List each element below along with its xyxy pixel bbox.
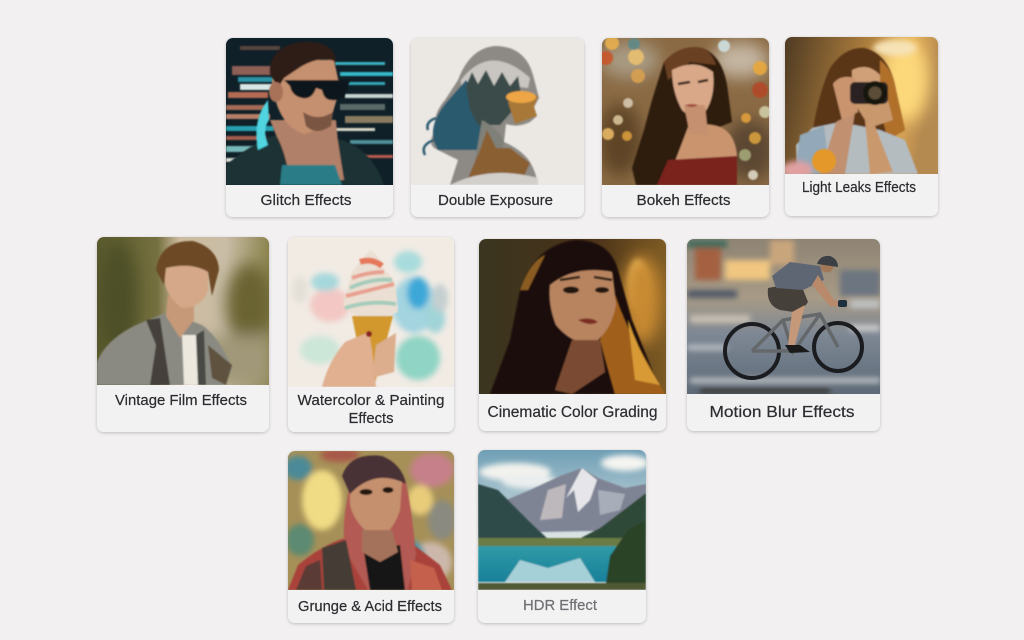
label: Cinematic Color Grading: Cinematic Color Grading — [488, 404, 658, 421]
label: Effects line 2: Effects — [348, 411, 394, 427]
image: light leaks photographer — [781, 37, 938, 179]
card: Light Leaks Effects — [781, 37, 938, 216]
label: Bokeh Effects: Bokeh Effects — [636, 193, 730, 209]
label: Double Exposure: Double Exposure — [438, 193, 553, 209]
label: Light Leaks Effects: Light Leaks Effects — [802, 180, 916, 196]
card: Motion Blur Effects — [687, 239, 880, 431]
image: vintage portrait — [97, 237, 274, 385]
image: HDR mountain lake — [478, 450, 649, 590]
label: Vintage Film Effects: Vintage Film Effects — [115, 393, 247, 409]
label: HDR Effect: HDR Effect — [523, 598, 597, 614]
card: Vintage Film Effects — [97, 237, 274, 432]
card: Grunge & Acid Effects — [284, 448, 456, 623]
card: Bokeh Effects — [598, 36, 775, 217]
image: bokeh portrait — [598, 36, 775, 185]
image: cinematic portrait — [479, 239, 666, 394]
image: motion blur cyclist — [687, 239, 880, 394]
card: HDR Effect — [478, 450, 649, 623]
card: Glitch Effects — [226, 38, 393, 217]
label: Grunge & Acid Effects: Grunge & Acid Effects — [298, 599, 442, 615]
image: glitch portrait — [226, 38, 393, 185]
label: Glitch Effects: Glitch Effects — [260, 193, 352, 209]
card: Double Exposure — [411, 38, 584, 217]
label: Watercolor & Painting line 1: Watercolor & Painting — [298, 393, 444, 409]
image: double exposure silhouette — [411, 38, 584, 185]
card: Cinematic Color Grading — [479, 239, 666, 431]
image: grunge portrait — [284, 448, 456, 590]
image: watercolor ice cream — [288, 237, 454, 387]
card: Watercolor & Painting Effects — [288, 237, 454, 432]
label: Motion Blur Effects: Motion Blur Effects — [710, 404, 854, 421]
